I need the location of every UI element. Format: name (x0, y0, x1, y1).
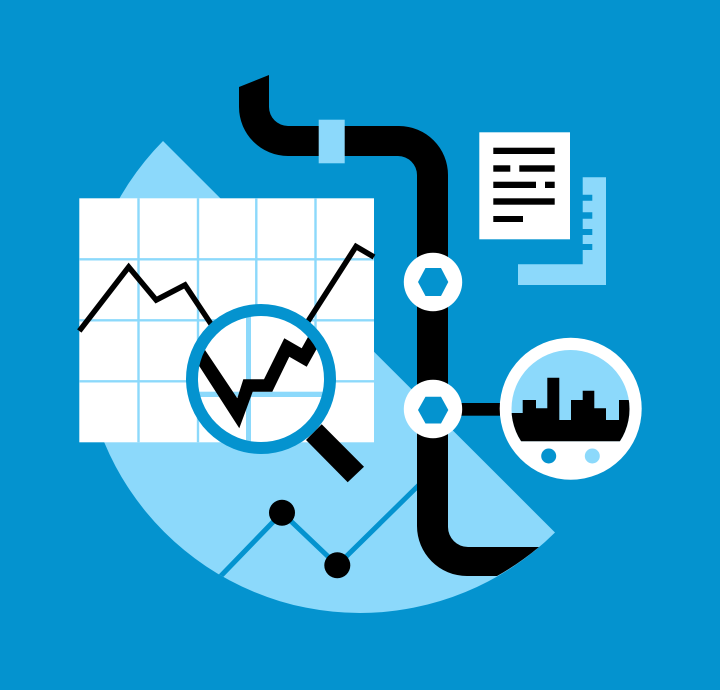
pipe nut lower (404, 380, 462, 438)
handle (306, 424, 364, 482)
chart background (79, 198, 374, 442)
document (479, 132, 570, 239)
pipe sleeve (319, 120, 345, 163)
gauge skyline bars (510, 378, 632, 443)
lens ring (192, 310, 330, 448)
light blue half disc (83, 141, 555, 613)
gauge display (510, 349, 632, 443)
magnified chart line (199, 337, 316, 428)
chart grid (79, 198, 374, 442)
pipe (239, 75, 539, 576)
lens (195, 313, 327, 445)
small line graph with two points (219, 484, 417, 578)
illustration: data analysis pipeline (77, 75, 642, 613)
ruler (518, 177, 606, 285)
gauge indicator dots (541, 448, 556, 464)
connector to gauge (458, 403, 504, 416)
gauge (500, 338, 642, 480)
magnified grid (199, 316, 323, 442)
magnifying glass (190, 310, 364, 482)
document text lines (493, 148, 555, 222)
line chart panel (79, 198, 374, 442)
pipe nut upper (404, 253, 462, 311)
gauge body (500, 338, 642, 480)
chart line (79, 246, 374, 331)
